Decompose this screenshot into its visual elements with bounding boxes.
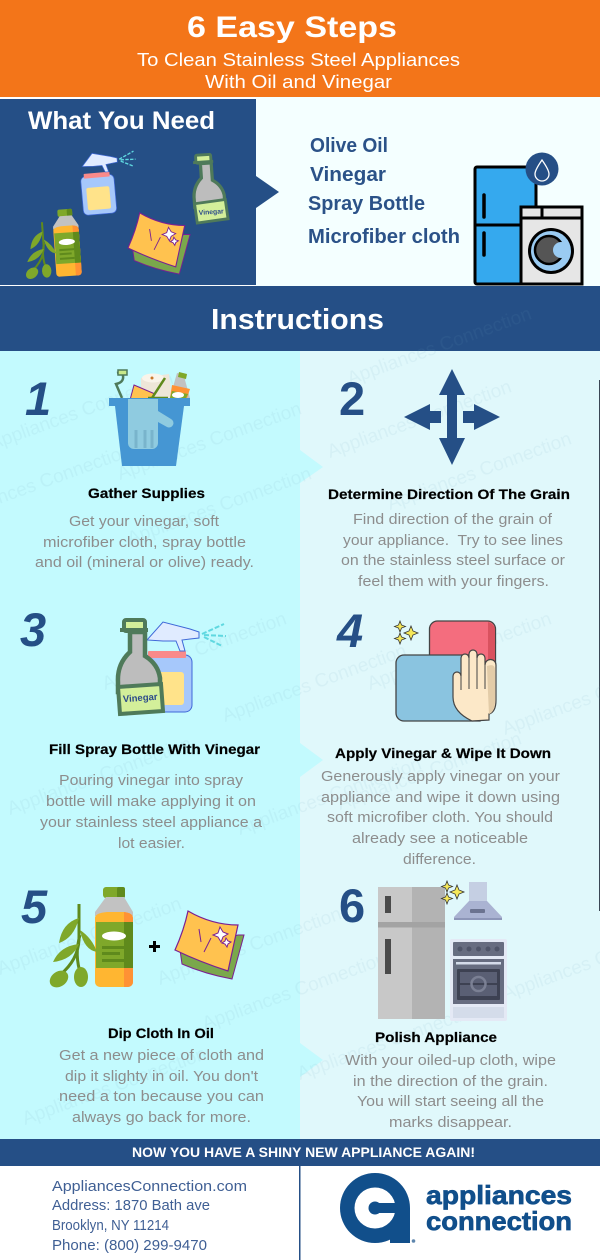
step 6 <box>339 879 556 1131</box>
icon: vinegar bottle <box>191 153 228 223</box>
icon: cloth <box>128 213 190 274</box>
body text: your stainless steel appliance a <box>40 814 263 831</box>
body text: Get your vinegar, soft <box>69 513 220 530</box>
body text: already see a noticeable <box>352 830 528 847</box>
watermarks: Appliances Connection <box>385 428 574 515</box>
body text: You will start seeing all the <box>357 1093 544 1110</box>
body text: With your oiled-up cloth, wipe <box>345 1052 556 1069</box>
body text: Pouring vinegar into spray <box>59 772 244 789</box>
step 4 <box>321 604 560 868</box>
icon: sparkles <box>394 621 418 644</box>
number 2: 2 <box>339 372 365 425</box>
icon: fridge and washer <box>475 152 582 284</box>
body text: Get a new piece of cloth and <box>59 1047 264 1064</box>
icon: cloth <box>175 911 244 979</box>
icon: cloth wiping hand <box>396 621 496 721</box>
logo wordmark: connection <box>426 1206 572 1236</box>
body text <box>345 1052 556 1131</box>
icon: bucket of supplies <box>109 370 190 466</box>
body text: lot easier. <box>118 835 185 852</box>
body text: dip it slighty in oil. You don't <box>65 1068 259 1085</box>
heading: Apply Vinegar & Wipe It Down <box>335 745 551 761</box>
heading: instructions: Instructions <box>211 304 384 336</box>
icon: stove <box>450 939 507 1021</box>
step 3 <box>20 603 263 852</box>
number 6: 6 <box>339 879 365 932</box>
subtitle: With Oil and Vinegar <box>205 72 392 92</box>
watermarks: Appliances Connection <box>0 893 184 980</box>
watermarks: Appliances Connection <box>325 376 514 463</box>
list: supplies: Spray Bottle <box>308 193 425 215</box>
heading: Dip Cloth In Oil <box>108 1025 214 1041</box>
list: supplies: Olive Oil <box>310 135 388 157</box>
body text: bottle will make applying it on <box>46 793 256 810</box>
watermarks: Appliances Connection <box>335 728 524 815</box>
icon: plus sign <box>149 941 160 952</box>
body text: Find direction of the grain of <box>353 511 553 528</box>
watermarks: Appliances Connection <box>235 753 424 840</box>
watermarks: Appliances Connection <box>155 903 344 990</box>
icon: water drop badge <box>526 152 558 186</box>
closing banner <box>0 1139 600 1166</box>
logo wordmark <box>426 1180 572 1236</box>
number 1: 1 <box>25 372 51 425</box>
logo: appliances connection <box>340 1173 572 1243</box>
body text: marks disappear. <box>389 1114 512 1131</box>
list: supplies: Microfiber cloth <box>308 226 460 248</box>
body text <box>35 513 254 571</box>
number 4: 4 <box>336 604 363 657</box>
watermarks: Appliances Connection <box>345 303 534 390</box>
watermarks: Appliances Connection <box>100 608 289 695</box>
subtitle <box>137 50 460 92</box>
icon: fridge <box>378 887 445 1019</box>
body text: and oil (mineral or olive) ready. <box>35 554 254 571</box>
icon: oil bottle and olive branch <box>19 208 82 282</box>
contact details: AppliancesConnection.com <box>52 1178 247 1195</box>
logo mark <box>340 1173 415 1243</box>
step 1 <box>25 370 254 571</box>
number 3: 3 <box>20 603 46 656</box>
body text: appliance and wipe it down using <box>321 789 560 806</box>
heading: Gather Supplies <box>88 485 205 501</box>
contact details <box>52 1178 247 1254</box>
list: supplies: Vinegar <box>310 164 386 186</box>
panel: what you need <box>0 99 279 285</box>
watermarks: Appliances Connection <box>125 463 314 550</box>
closing banner: NOW YOU HAVE A SHINY NEW APPLIANCE AGAIN! <box>132 1144 475 1160</box>
step 5 <box>21 880 264 1126</box>
body text <box>59 1047 264 1126</box>
list: supplies <box>308 135 460 248</box>
panel: steps background <box>0 351 600 1139</box>
icon: sparkles <box>442 881 464 904</box>
header banner <box>0 0 600 97</box>
watermarks: Appliances Connection <box>115 398 304 485</box>
body text: in the direction of the grain. <box>353 1073 548 1090</box>
heading: Polish Appliance <box>375 1029 497 1045</box>
body text: need a ton because you can <box>59 1088 264 1105</box>
body text <box>40 772 263 852</box>
icon: oil bottle and olive branch <box>47 887 133 991</box>
icon: spray bottle <box>78 150 140 216</box>
watermarks: Appliances Connection <box>200 948 389 1035</box>
watermarks: Appliances Connection <box>20 1043 209 1130</box>
body text: difference. <box>403 851 476 868</box>
heading: Fill Spray Bottle With Vinegar <box>49 741 261 757</box>
body text: always go back for more. <box>72 1109 251 1126</box>
body text: Generously apply vinegar on your <box>321 768 560 785</box>
step 2 <box>328 369 570 590</box>
icon: range hood <box>454 882 502 920</box>
instructions banner <box>0 286 600 351</box>
watermarks: Appliances Connection <box>295 998 484 1085</box>
contact details: Address: 1870 Bath ave <box>52 1197 210 1214</box>
heading: Determine Direction Of The Grain <box>328 486 570 502</box>
footer divider <box>299 1166 300 1260</box>
icon: spray bottle <box>143 622 226 712</box>
contact details: Brooklyn, NY 11214 <box>52 1217 169 1234</box>
icon: vinegar bottle: Vinegar <box>199 208 224 217</box>
panel: what you need list <box>256 97 600 286</box>
icon: four direction arrows <box>404 369 500 465</box>
watermarks: Appliances Connection <box>5 733 194 820</box>
icon: vinegar bottle <box>118 620 163 714</box>
title: 6 Easy Steps <box>187 11 397 44</box>
subtitle: To Clean Stainless Steel Appliances <box>137 50 460 70</box>
watermarks: Appliances Connection <box>365 608 554 695</box>
body text <box>341 511 565 590</box>
icon: vinegar bottle: Vinegar <box>123 692 158 705</box>
body text: feel them with your fingers. <box>358 573 549 590</box>
body text <box>321 768 560 868</box>
watermarks: Appliances Connection <box>220 640 409 727</box>
body text: on the stainless steel surface or <box>341 552 565 569</box>
body text: soft microfiber cloth. You should <box>327 809 553 826</box>
number 5: 5 <box>21 880 48 933</box>
body text: your appliance. Try to see lines <box>343 532 563 549</box>
contact details: Phone: (800) 299-9470 <box>52 1237 207 1254</box>
body text: microfiber cloth, spray bottle <box>43 534 246 551</box>
watermarks <box>0 303 600 1130</box>
heading: what you need: What You Need <box>28 107 215 135</box>
logo wordmark: appliances <box>426 1180 572 1210</box>
